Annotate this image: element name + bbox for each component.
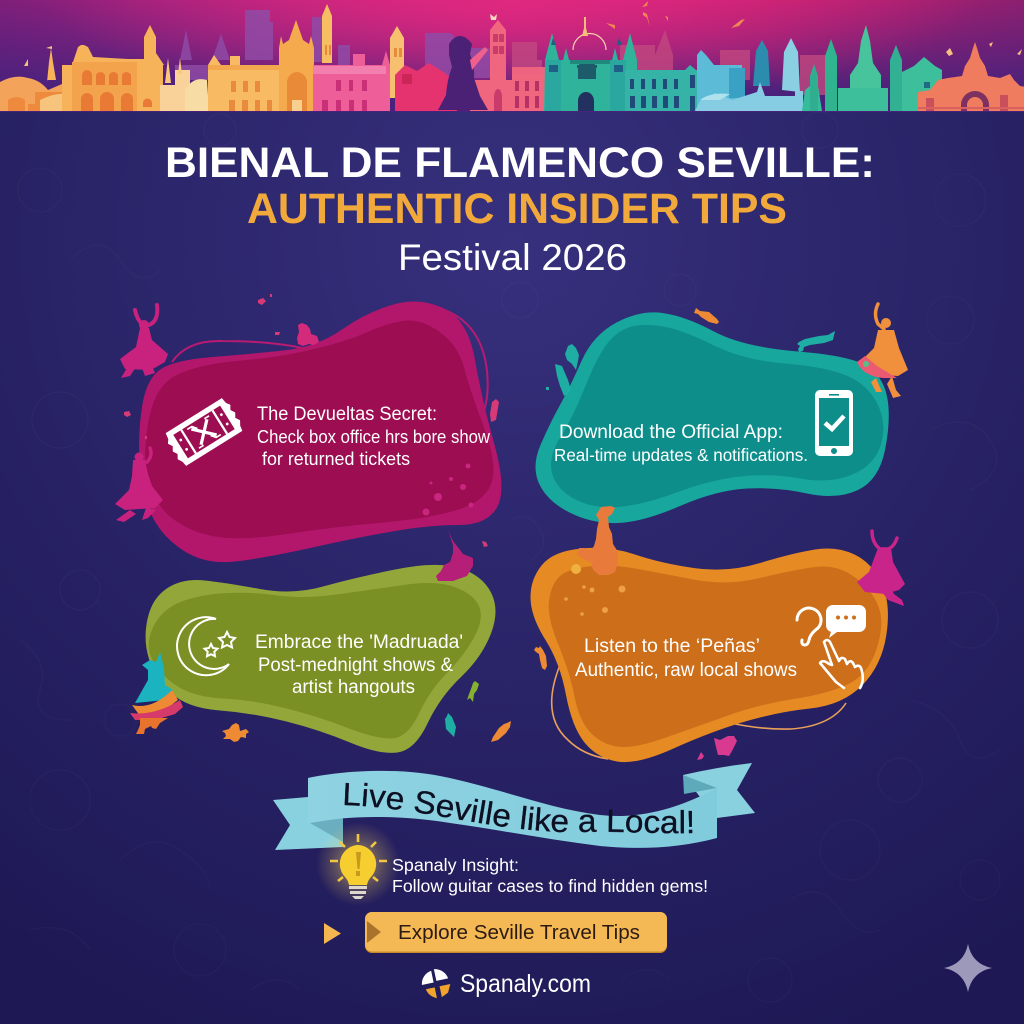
icon: light bulb <box>316 822 400 906</box>
heading line 1: BIENAL DE FLAMENCO SEVILLE: <box>165 139 875 187</box>
blue buildings <box>697 50 742 107</box>
gold building <box>208 55 279 111</box>
icon: phone with check <box>815 390 853 456</box>
skyline banner <box>0 0 1024 112</box>
tip text: The Devueltas Secret: <box>257 404 437 425</box>
title <box>165 139 875 278</box>
panel: official app <box>535 312 889 523</box>
dancer: magenta bottom right <box>857 531 905 606</box>
dancer: orange top right <box>857 304 908 398</box>
subtitle: Festival 2026 <box>398 237 627 278</box>
panel: devueltas secret <box>139 302 501 562</box>
logo: spanaly.com <box>419 966 591 1001</box>
left watercolor foliage <box>0 77 92 111</box>
icon: question, chat and hand <box>797 605 866 688</box>
dancer: multicolour bottom left <box>130 652 183 734</box>
tip text: Authentic, raw local shows <box>575 659 797 681</box>
tip text: Listen to the ‘Peñas’ <box>584 635 760 657</box>
tip text: Download the Official App: <box>559 421 783 443</box>
insight text <box>392 855 708 896</box>
tip text <box>257 404 491 469</box>
tip text <box>255 632 463 698</box>
tip text: artist hangouts <box>292 677 415 698</box>
tip text: Post-mednight shows & <box>258 655 453 676</box>
gothic block <box>279 20 314 111</box>
red block <box>395 63 457 111</box>
tip text: Real-time updates & notifications. <box>554 445 808 465</box>
tower cream <box>390 26 404 98</box>
splash: magenta pouring <box>436 528 473 581</box>
heading line 2: AUTHENTIC INSIDER TIPS <box>247 185 787 233</box>
palace <box>62 25 164 111</box>
tip text <box>554 421 808 465</box>
pink building <box>313 51 390 111</box>
panel: madrugada <box>146 565 496 753</box>
icon: sparkle <box>944 944 992 992</box>
icon: ticket <box>163 396 245 468</box>
logo: spanaly.com: Spanaly.com <box>460 970 591 998</box>
tall tower <box>322 4 332 63</box>
tip text <box>575 635 797 681</box>
splash: orange pouring <box>577 506 618 575</box>
teal building <box>625 65 698 111</box>
splashes: small silhouettes <box>124 294 835 760</box>
dancer: magenta left <box>115 448 163 522</box>
icon: play arrow <box>324 923 341 944</box>
right of figure <box>470 20 545 111</box>
dark figure <box>438 36 488 110</box>
insight text: Spanaly Insight: <box>392 855 519 875</box>
teal church <box>544 17 637 111</box>
bubbles <box>422 464 474 516</box>
green towers <box>802 86 822 111</box>
ribbon: live seville like a local: Live Seville like a Local! <box>344 782 692 834</box>
ribbon: live seville like a local <box>273 763 755 850</box>
icon: moon and stars <box>177 617 235 675</box>
salmon palace <box>918 42 1024 111</box>
birds and petals <box>24 1 1022 66</box>
insight text: Follow guitar cases to find hidden gems! <box>392 876 708 896</box>
button: explore seville travel tips: Explore Seville Travel Tips <box>398 921 640 944</box>
dancer: magenta top left <box>120 305 168 378</box>
tip text: Check box office hrs bore show <box>257 427 491 447</box>
tip text: Embrace the 'Madruada' <box>255 632 463 653</box>
tip text: for returned tickets <box>262 449 410 469</box>
button: explore seville travel tips <box>365 912 667 953</box>
bubbles <box>564 564 626 616</box>
panel: penas <box>530 548 888 762</box>
